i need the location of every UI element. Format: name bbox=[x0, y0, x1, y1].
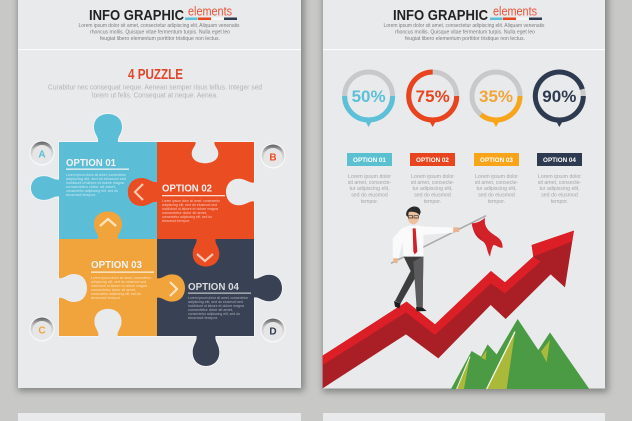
piece: blue bbox=[31, 114, 157, 239]
column: option 04: sit amet, consecte- bbox=[538, 180, 582, 186]
option 03: OPTION 03 bbox=[91, 259, 142, 271]
puzzle subtitle: lorem ut felis. Consequat at neque. Aenea. bbox=[92, 90, 218, 100]
column: option 04: tur adipiscing elit, bbox=[539, 186, 580, 192]
option 03: consectetur dolor sit amet, bbox=[91, 287, 136, 292]
interlocking tabs bbox=[154, 236, 219, 302]
intro text: Lorem ipsum dolor sit amet, consectetur adipiscing elit. Aliquam venenatis bbox=[384, 23, 545, 29]
option 02: incididunt ut labore et dolore magna bbox=[162, 206, 219, 211]
option 01: OPTION 01 bbox=[66, 157, 116, 169]
column: option 02 bbox=[410, 153, 455, 205]
piece: orange bbox=[59, 212, 157, 336]
businessman with flag bbox=[391, 206, 503, 311]
growth arrow bbox=[323, 231, 574, 388]
panel: lower left page bbox=[18, 413, 301, 421]
intro text: feugiat libero elementum porttitor tristique non lectus. bbox=[100, 36, 220, 42]
heading: 4 puzzle: 4 PUZZLE bbox=[128, 67, 183, 83]
option 01 bbox=[66, 157, 129, 197]
column: option 01: sit amet, consecte- bbox=[348, 180, 392, 186]
option 04: Lorem ipsum dolor sit amet, consectetur bbox=[188, 295, 249, 300]
option 02: OPTION 02 bbox=[162, 182, 212, 194]
column: option 02: sed do eiusmod bbox=[414, 192, 451, 198]
panel: left page bbox=[18, 0, 301, 388]
column: option 01: OPTION 01 bbox=[353, 157, 386, 164]
badge B bbox=[260, 144, 286, 168]
option 04: consectetur adipiscing elit, sed do bbox=[188, 311, 241, 316]
option 01: eiusmod tempor. bbox=[66, 192, 96, 197]
mountains bbox=[451, 319, 589, 389]
column: option 02: sit amet, consecte- bbox=[411, 180, 455, 186]
option 03: adipiscing elit, sed do eiusmod sed bbox=[91, 279, 146, 284]
title: INFO GRAPHIC bbox=[393, 7, 488, 24]
title accent: elements: elements bbox=[493, 4, 537, 18]
donut: 50% bbox=[345, 72, 393, 127]
donut: 90% bbox=[535, 72, 583, 127]
option 02: adipiscing elit, sed do eiusmod sed bbox=[162, 202, 217, 207]
donut: 35%: 35% bbox=[479, 88, 513, 106]
column: option 03: tur adipiscing elit, bbox=[476, 186, 517, 192]
column: option 02: tempor. bbox=[424, 199, 441, 205]
puzzle halo bbox=[31, 114, 282, 366]
header: left page bbox=[78, 4, 240, 42]
option 02: eiusmod tempor. bbox=[162, 218, 190, 223]
hair bbox=[406, 206, 421, 217]
chevron: up bbox=[100, 219, 116, 226]
donut: 35% bbox=[472, 72, 520, 127]
flag pole bbox=[391, 216, 486, 263]
column: option 02: tur adipiscing elit, bbox=[412, 186, 453, 192]
flag fold shade bbox=[474, 231, 487, 248]
shoes bbox=[394, 301, 427, 311]
intro text: Lorem ipsum dolor sit amet, consectetur adipiscing elit. Aliquam venenatis bbox=[78, 23, 240, 29]
option 04: adipiscing elit, sed do eiusmod sed bbox=[188, 299, 243, 304]
donut: 90%: 90% bbox=[542, 88, 577, 106]
badge D: D bbox=[269, 326, 277, 338]
column: option 01: tur adipiscing elit, bbox=[349, 186, 390, 192]
glasses bbox=[408, 216, 418, 218]
title: INFO GRAPHIC bbox=[89, 7, 184, 24]
column: option 04 bbox=[537, 153, 582, 205]
option 04 bbox=[188, 281, 251, 320]
shirt bbox=[393, 226, 453, 258]
intro text bbox=[78, 23, 240, 42]
option 03: eiusmod tempor. bbox=[91, 295, 121, 300]
column: option 03: sed do eiusmod bbox=[478, 192, 515, 198]
badge D bbox=[260, 318, 286, 342]
badge C bbox=[30, 316, 54, 342]
column: option 01 bbox=[347, 153, 392, 205]
option 03 bbox=[91, 259, 154, 300]
intro text bbox=[384, 23, 545, 42]
option 03: consectetur adipiscing elit, sed do bbox=[91, 291, 142, 296]
intro text: rhoncus mollis. Quisque vitae fermentum turpis. Nulla eget leo bbox=[90, 30, 230, 36]
option 04: eiusmod tempor. bbox=[188, 315, 218, 320]
puzzle subtitle bbox=[48, 82, 262, 100]
column: option 03: Lorem ipsum dolor bbox=[475, 174, 518, 180]
tie bbox=[413, 228, 417, 254]
column: option 01: sed do eiusmod bbox=[351, 192, 388, 198]
donut: 50%: 50% bbox=[352, 88, 386, 106]
column: option 03: tempor. bbox=[488, 199, 505, 205]
donut: 75% bbox=[409, 72, 457, 127]
column: option 01: tempor. bbox=[361, 199, 378, 205]
column: option 03 bbox=[474, 153, 519, 205]
header: right page bbox=[384, 4, 545, 42]
puzzle bbox=[31, 114, 282, 366]
chevron: down bbox=[197, 254, 213, 261]
hands bbox=[393, 227, 459, 263]
flag bbox=[472, 218, 503, 257]
column: option 04: Lorem ipsum dolor bbox=[538, 174, 581, 180]
column: option 03: OPTION 03 bbox=[480, 157, 513, 164]
column: option 04: OPTION 04 bbox=[543, 157, 576, 164]
column: option 04: tempor. bbox=[551, 199, 568, 205]
intro text: feugiat libero elementum porttitor tristique non lectus. bbox=[405, 36, 525, 42]
chevron: right bbox=[170, 282, 177, 296]
option 01: incididunt ut labore et dolore magna bbox=[66, 180, 125, 185]
column: option 04: sed do eiusmod bbox=[541, 192, 578, 198]
badge A bbox=[30, 140, 54, 166]
badge C: C bbox=[38, 326, 46, 336]
piece: red bbox=[128, 142, 254, 239]
option 03: incididunt ut labore et dolore magna bbox=[91, 283, 148, 288]
panel: right page bbox=[323, 0, 605, 389]
column: option 01: Lorem ipsum dolor bbox=[348, 174, 391, 180]
piece: dark bbox=[157, 239, 282, 366]
head bbox=[408, 210, 419, 224]
accent colour bars bbox=[490, 18, 542, 20]
option 01: adipiscing elit, sed do eiusmod sed bbox=[66, 176, 126, 181]
column: option 03: sit amet, consecte- bbox=[475, 180, 519, 186]
option 04: incididunt ut labore et dolore magna bbox=[188, 303, 245, 308]
chevron: left bbox=[135, 184, 143, 200]
accent colour bars bbox=[185, 18, 237, 20]
option 04: consectetur dolor sit amet, bbox=[188, 307, 233, 312]
badge B: B bbox=[269, 152, 277, 164]
option 01: consectetur dolor sit amet, bbox=[66, 184, 116, 189]
panel: lower right page bbox=[323, 413, 605, 421]
option 01: Lorem ipsum dolor sit amet, consectetur bbox=[66, 172, 127, 177]
option 02: consectetur dolor sit amet, bbox=[162, 210, 207, 215]
badge A: A bbox=[38, 150, 46, 160]
option 02 bbox=[162, 182, 225, 223]
option 03: Lorem ipsum dolor sit amet, consectetur bbox=[91, 275, 152, 280]
title accent: elements: elements bbox=[188, 4, 232, 18]
option 04: OPTION 04 bbox=[188, 281, 239, 293]
column: option 02: Lorem ipsum dolor bbox=[411, 174, 454, 180]
intro text: rhoncus mollis. Quisque vitae fermentum turpis. Nulla eget leo bbox=[395, 30, 535, 36]
trousers bbox=[395, 256, 423, 308]
column: option 02: OPTION 02 bbox=[416, 157, 449, 164]
option 01: consectetur adipiscing elit, sed do bbox=[66, 188, 119, 193]
option 02: consectetur adipiscing elit, sed do bbox=[162, 214, 213, 219]
option 02: Lorem ipsum dolor sit amet, consectetur bbox=[162, 198, 221, 203]
donut: 75%: 75% bbox=[416, 88, 450, 106]
puzzle subtitle: Curabitur nec consequat neque. Aenean semper risus tellus. Integer sed bbox=[48, 82, 262, 92]
notches bbox=[56, 140, 257, 339]
